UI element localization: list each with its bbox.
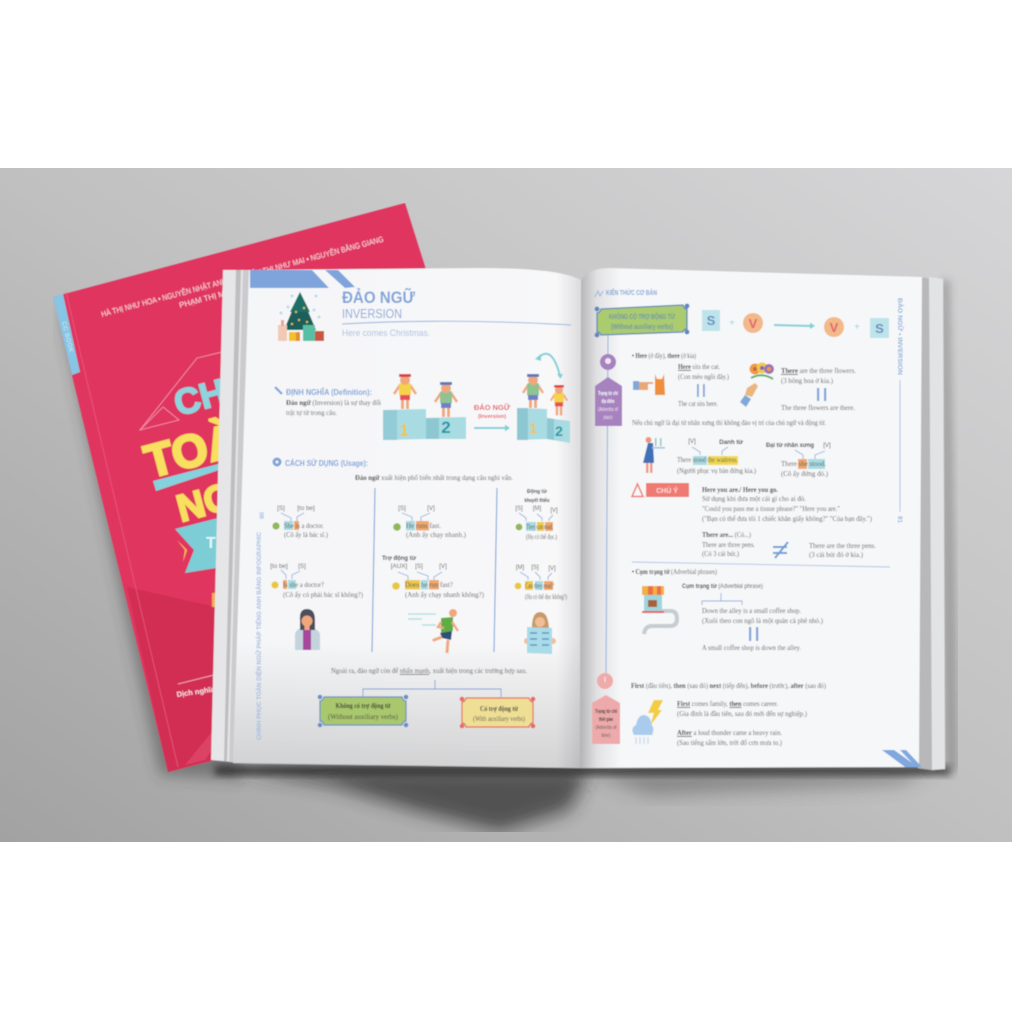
formula: V bbox=[830, 320, 839, 335]
icon: hand and cat bbox=[633, 374, 665, 395]
example: They can read: Động từ bbox=[527, 489, 547, 495]
example: He runs fast bbox=[393, 505, 466, 539]
example: Can they read: [S] bbox=[531, 565, 539, 571]
example: She is a doctor: [S] bbox=[277, 505, 285, 512]
flowers example: (3 bông hoa ở kia.) bbox=[781, 376, 833, 385]
icon: reader bbox=[524, 612, 556, 654]
title lettering: NG bbox=[172, 475, 238, 531]
definition bbox=[275, 387, 381, 417]
there are note: There are the three pens. bbox=[809, 541, 876, 550]
side title right page: ĐẢO NGỮ • INVERSION bbox=[896, 298, 903, 376]
corner tabs bbox=[882, 750, 922, 767]
example: Is she a doctor: (Cô ấy có phải bác sĩ không?) bbox=[283, 590, 363, 599]
subtitle bbox=[176, 674, 218, 699]
example: stood the waitress: There stood the waitress. bbox=[677, 455, 738, 464]
example: Does he run fast: [AUX] bbox=[391, 563, 407, 570]
side title right page bbox=[896, 298, 903, 523]
right page section title bbox=[595, 287, 657, 297]
spine label bbox=[53, 294, 80, 375]
cat example: The cat sits here. bbox=[678, 399, 718, 408]
side title left page: CHINH PHỤC TOÀN DIỆN NGỮ PHÁP TIẾNG ANH BẰNG INFOGRAPHIC bbox=[253, 532, 263, 740]
podium diagram before: 2 bbox=[441, 418, 451, 437]
example: He runs fast: He runs fast. bbox=[406, 521, 441, 530]
inversion arrow: (Inversion) bbox=[478, 414, 506, 420]
adverbial example: Down the alley is a small coffee shop. bbox=[702, 606, 801, 615]
formula: V bbox=[749, 316, 758, 331]
box: no auxiliary heading: KHÔNG CÓ TRỢ ĐỘNG TỪ bbox=[609, 312, 675, 321]
icon: waitress bbox=[643, 437, 665, 473]
title lettering: CHỈ bbox=[169, 368, 240, 424]
icon: doctor bbox=[295, 609, 320, 650]
time examples bbox=[677, 699, 807, 747]
formula: S bbox=[707, 313, 716, 328]
there are note bbox=[702, 530, 876, 559]
time examples: First comes family, then comes career. bbox=[677, 699, 778, 708]
podium diagram before: 1 bbox=[399, 421, 409, 440]
example: Is she a doctor: [S] bbox=[298, 563, 306, 570]
title: INVERSION bbox=[342, 307, 402, 321]
box: no auxiliary heading bbox=[595, 304, 689, 337]
tag: adverbs of time: (Adverbs of bbox=[596, 725, 617, 731]
title: Here comes Christmas. bbox=[342, 328, 430, 338]
icon: not equal bbox=[773, 542, 788, 558]
flowers example: There are the three flowers. bbox=[781, 366, 856, 375]
panel: red book cover bbox=[53, 203, 445, 772]
formula: S bbox=[875, 321, 884, 336]
right page section title: KIẾN THỨC CƠ BẢN bbox=[606, 287, 657, 297]
box: without auxiliary verbs bbox=[318, 695, 408, 727]
definition: ĐỊNH NGHĨA (Definition): bbox=[286, 387, 372, 397]
flowers example bbox=[781, 366, 856, 412]
note text: ("Bạn có thể đưa tôi 1 chiếc khăn giấy không?" "Của bạn đây.") bbox=[702, 514, 872, 523]
formula bbox=[702, 310, 889, 338]
tag: adverbs of place: địa điểm bbox=[602, 398, 615, 405]
example: Does he run fast: (Anh ấy chạy nhanh không?) bbox=[405, 590, 484, 599]
subtitle: Dịch nghĩa bbox=[176, 685, 216, 699]
tag: adverbs of time: Trạng từ chỉ bbox=[595, 709, 617, 715]
title lettering bbox=[139, 352, 246, 607]
box: without auxiliary verbs: (Without auxiliary verbs) bbox=[328, 712, 398, 721]
figure 2 bbox=[435, 382, 457, 417]
example: Can they read: [M] bbox=[516, 565, 524, 571]
example: she stood: [V] bbox=[823, 442, 831, 449]
icon: runner bbox=[408, 609, 458, 653]
example: They can read: [M] bbox=[533, 506, 541, 512]
title: ĐẢO NGỮ bbox=[342, 287, 416, 307]
formula: + bbox=[729, 318, 735, 329]
time examples: (Gia đình là đầu tiên, sau đó mới đến sự nghiệp.) bbox=[677, 709, 807, 718]
icon: flowers and hand bbox=[740, 362, 774, 407]
example: They can read: [S] bbox=[515, 506, 523, 512]
here there heading: • Here (ở đây), there (ở kia) bbox=[632, 351, 696, 360]
box: with auxiliary verbs: Có trợ động từ bbox=[480, 704, 518, 713]
note text: Here you are./ Here you go. bbox=[702, 485, 778, 494]
side title left page: 90 bbox=[259, 511, 266, 519]
usage intro: Đảo ngữ xuất hiện phổ biến nhất trong dạng câu nghi vấn. bbox=[355, 473, 513, 482]
example: she stood: There she stood. bbox=[781, 459, 826, 468]
title lettering: T bbox=[206, 535, 216, 552]
time examples: After a loud thunder came a heavy rain. bbox=[677, 728, 782, 737]
book shadows bbox=[60, 280, 958, 832]
example: They can read: They can read. bbox=[526, 522, 553, 531]
arc arrow bbox=[538, 354, 560, 376]
usage heading bbox=[274, 457, 368, 468]
inversion arrow: ĐẢO NGỮ bbox=[474, 403, 511, 412]
example: Does he run fast: [V] bbox=[439, 563, 447, 570]
tag: adverbs of place: Trạng từ chỉ bbox=[598, 391, 618, 397]
example: she stood bbox=[766, 442, 831, 478]
cat example bbox=[678, 362, 729, 408]
there are note: There are three pens. bbox=[702, 540, 755, 549]
callout: note: CHÚ Ý bbox=[656, 486, 678, 495]
example: She is a doctor: She is a doctor. bbox=[284, 521, 324, 530]
time examples: (Sau tiếng sấm lớn, trời đổ cơn mưa to.) bbox=[677, 738, 782, 747]
panel: right page bbox=[580, 268, 922, 768]
spine label: CC BOOK bbox=[60, 321, 74, 353]
there are note: (3 cái bút đó ở kia.) bbox=[809, 550, 863, 559]
emphasis sentence: Ngoài ra, đảo ngữ còn để nhấn mạnh, xuất hiện trong các trường hợp sau. bbox=[331, 666, 527, 675]
adverbial example bbox=[682, 583, 823, 652]
flowers example: The three flowers are there. bbox=[781, 403, 855, 412]
box: with auxiliary verbs: (With auxiliary verbs) bbox=[473, 714, 525, 723]
there are note: (Có 3 cái bút.) bbox=[702, 549, 739, 558]
example: They can read: khuyết thiếu bbox=[524, 497, 550, 504]
example: She is a doctor: (Cô ấy là bác sĩ.) bbox=[284, 530, 328, 539]
adverbial phrases heading: • Cụm trạng từ (Adverbial phrases) bbox=[632, 567, 717, 576]
panel: left page bbox=[233, 268, 581, 768]
figure 1 bbox=[394, 374, 416, 409]
example: stood the waitress: Danh từ bbox=[719, 439, 743, 446]
podium diagram after: 1 bbox=[529, 420, 537, 437]
example: They can read: [V] bbox=[550, 508, 558, 514]
column dividers bbox=[372, 488, 497, 652]
tag: adverbs of place bbox=[595, 354, 622, 426]
note text bbox=[702, 485, 872, 523]
box: without auxiliary verbs: Không có trợ động từ bbox=[336, 701, 391, 710]
title bbox=[342, 287, 571, 338]
tag: adverbs of time bbox=[592, 673, 620, 744]
authors: HÀ THỊ NHƯ HOA • NGUYỄN NHẬT ANH • NGUYỄN THỊ NHƯ MAI • NGUYỄN BẰNG GIANG bbox=[100, 235, 385, 319]
example: Does he run fast: [S] bbox=[415, 563, 423, 570]
example: Does he run fast bbox=[382, 555, 484, 599]
podium diagram after bbox=[517, 354, 570, 443]
inversion arrow bbox=[474, 403, 511, 432]
side title left page bbox=[253, 511, 266, 740]
example: He runs fast: (Anh ấy chạy nhanh.) bbox=[406, 530, 466, 539]
title lettering: TOÀ bbox=[139, 413, 246, 488]
example: They can read bbox=[515, 489, 558, 541]
example: She is a doctor: [to be] bbox=[297, 505, 315, 512]
icon: christmas tree bbox=[278, 292, 324, 341]
example: Can they read: (Họ có thể đọc không?) bbox=[525, 592, 567, 601]
time adverbs heading: First (đầu tiên), then (sau đó) next (tiếp đến), before (trước), after (sau đó) bbox=[631, 681, 826, 690]
example: He runs fast: [V] bbox=[427, 505, 435, 512]
podium diagram before bbox=[383, 374, 466, 440]
box: no auxiliary heading: (Without auxiliary verbs) bbox=[611, 324, 673, 331]
tag: adverbs of place: (Adverbs of bbox=[598, 407, 618, 413]
adverbial example: A small coffee shop is down the alley. bbox=[702, 643, 801, 652]
left page lower shading bbox=[233, 640, 580, 768]
note text: "Could you pass me a tissue please?" "Here you are." bbox=[702, 504, 840, 513]
example: Does he run fast: Does he run fast? bbox=[405, 580, 454, 589]
header tabs bbox=[250, 270, 355, 288]
example: she stood: (Cô ấy đứng đó.) bbox=[781, 469, 828, 478]
callout: note bbox=[632, 483, 689, 497]
usage heading: CÁCH SỬ DỤNG (Usage): bbox=[285, 457, 368, 468]
pronoun note: Nếu chủ ngữ là đại từ nhân xưng thì không đảo vị trí của chủ ngữ và động từ. bbox=[632, 418, 826, 427]
example: stood the waitress bbox=[677, 438, 756, 475]
icon: gear bbox=[274, 459, 280, 465]
tag: adverbs of time: time) bbox=[602, 733, 611, 739]
note text: Sử dụng khi đưa một cái gì cho ai đó. bbox=[702, 494, 806, 503]
there are note: There are... (Có...) bbox=[702, 530, 751, 539]
icon: coffee shop and road bbox=[642, 586, 677, 634]
tag: adverbs of place: place) bbox=[604, 415, 613, 421]
cat example: Here sits the cat. bbox=[678, 362, 720, 371]
example: They can read: (Họ có thể đọc.) bbox=[526, 532, 557, 541]
cat example: (Con mèo ngồi đây.) bbox=[678, 372, 729, 381]
example: stood the waitress: (Người phục vụ bàn đứng kia.) bbox=[677, 466, 756, 475]
adverbial example: (Xuôi theo con ngõ là một quán cà phê nhỏ.) bbox=[702, 616, 823, 625]
adverbial example: Cụm trạng từ (Adverbial phrase) bbox=[682, 583, 763, 590]
example: Can they read: [V] bbox=[548, 566, 556, 572]
photo background bbox=[0, 168, 1012, 842]
definition: trật tự từ trong câu. bbox=[286, 408, 337, 417]
timeline bbox=[606, 335, 608, 674]
example: Does he run fast: Trợ động từ bbox=[382, 555, 416, 562]
authors: PHẠM THỊ MAI bbox=[178, 287, 233, 310]
example: Can they read: Can they read? bbox=[525, 581, 554, 590]
example: she stood: Đại từ nhân xưng bbox=[766, 442, 814, 449]
box: with auxiliary verbs bbox=[460, 697, 535, 728]
branch connector bbox=[363, 680, 501, 697]
example: Is she a doctor: [to be] bbox=[270, 563, 288, 570]
example: She is a doctor bbox=[272, 505, 328, 539]
definition: Đảo ngữ (Inversion) là sự thay đổi bbox=[286, 398, 381, 407]
side title right page: 91 bbox=[896, 516, 903, 523]
panel: page stack edge bbox=[211, 270, 945, 770]
example: Is she a doctor: Is she a doctor? bbox=[283, 580, 325, 589]
icon: pencil bbox=[275, 387, 282, 394]
formula: + bbox=[854, 322, 860, 333]
example: stood the waitress: [V] bbox=[688, 438, 696, 445]
example: Is she a doctor bbox=[270, 563, 363, 599]
example: He runs fast: [S] bbox=[398, 505, 406, 512]
podium diagram after: 2 bbox=[555, 423, 563, 439]
icon: warning bbox=[632, 484, 643, 496]
icon: storm bbox=[632, 700, 663, 744]
tag: adverbs of time: thời gian bbox=[599, 717, 613, 723]
example: Can they read bbox=[515, 565, 567, 601]
